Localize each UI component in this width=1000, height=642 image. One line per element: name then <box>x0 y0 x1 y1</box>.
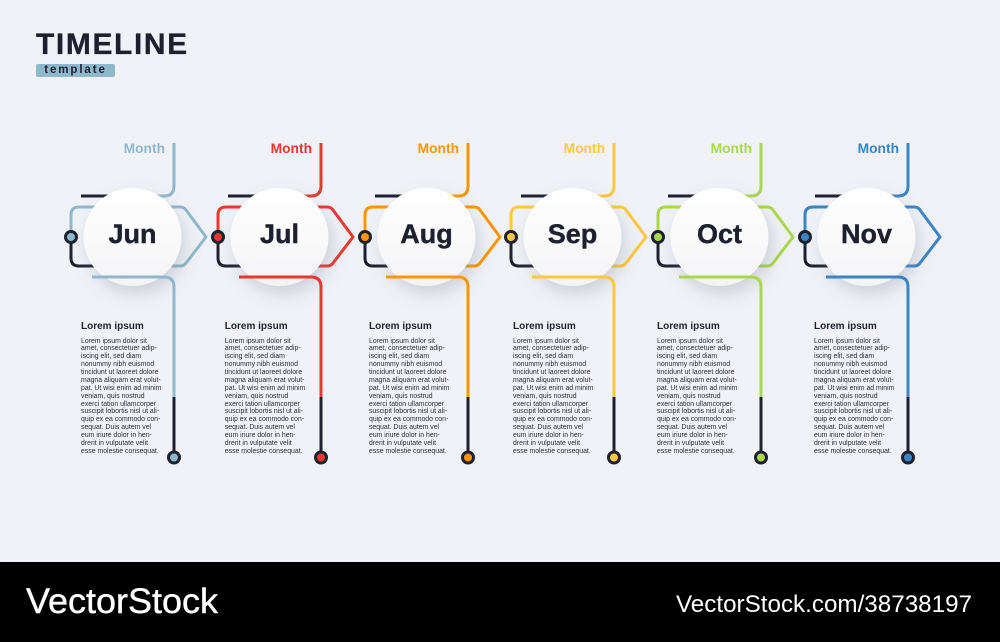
step: November: nonummy nibh euismod <box>814 361 887 368</box>
step: July: Lorem ipsum dolor sit <box>225 338 291 344</box>
step: June: Month <box>124 141 165 156</box>
step: July: nonummy nibh euismod <box>225 361 298 368</box>
step: October: suscipit lobortis nisl ut ali- <box>657 408 735 415</box>
step: June: Lorem ipsum dolor sit <box>81 338 147 344</box>
step: November: esse molestie consequat. <box>814 448 892 455</box>
step: September: Sep <box>548 219 598 249</box>
footer bar: VectorStock.com/38738197 <box>676 591 972 618</box>
step: November: tincidunt ut laoreet dolore <box>814 369 891 376</box>
step: August: tincidunt ut laoreet dolore <box>369 369 446 376</box>
step: August: sequat. Duis autem vel <box>369 424 439 431</box>
step: October: iscing elit, sed diam <box>657 353 717 360</box>
step: September: Lorem ipsum <box>513 321 576 332</box>
step: October: pat. Ut wisi enim ad minim <box>657 385 737 392</box>
step: September <box>504 141 648 464</box>
step: August: exerci tation ullamcorper <box>369 400 444 408</box>
step: June: drerit in vulputate velit <box>81 440 148 447</box>
step: July: quip ex ea commodo con- <box>225 416 304 423</box>
step: October: Month <box>711 141 752 156</box>
step: October <box>651 141 794 464</box>
step: October: eum iriure dolor in hen- <box>657 432 728 439</box>
footer bar <box>0 562 1000 642</box>
step: September: sequat. Duis autem vel <box>513 424 583 431</box>
step: July: tincidunt ut laoreet dolore <box>225 369 302 376</box>
step: June <box>64 141 208 464</box>
step: June: amet, consectetuer adip- <box>81 345 157 352</box>
step: June: veniam, quis nostrud <box>81 393 145 400</box>
step: August: drerit in vulputate velit <box>369 440 436 447</box>
step: July: veniam, quis nostrud <box>225 393 288 400</box>
step: October: drerit in vulputate velit <box>657 440 724 447</box>
step: June: Lorem ipsum <box>81 321 144 332</box>
step: September: esse molestie consequat. <box>513 448 591 455</box>
step: August: veniam, quis nostrud <box>369 393 433 400</box>
step: November: Lorem ipsum <box>814 321 877 332</box>
step: October: esse molestie consequat. <box>657 448 735 455</box>
step: July: suscipit lobortis nisl ut ali- <box>225 408 303 415</box>
step: October: veniam, quis nostrud <box>657 393 721 400</box>
step: September: tincidunt ut laoreet dolore <box>513 369 590 376</box>
step: November: Lorem ipsum dolor sit <box>814 338 880 344</box>
step: November <box>798 141 942 464</box>
step: September: eum iriure dolor in hen- <box>513 432 584 439</box>
step: October: amet, consectetuer adip- <box>657 345 733 352</box>
step: August: Lorem ipsum <box>369 321 432 332</box>
step: August: eum iriure dolor in hen- <box>369 432 440 439</box>
step: August: pat. Ut wisi enim ad minim <box>369 385 449 392</box>
step: September: drerit in vulputate velit <box>513 440 580 447</box>
step: July: eum iriure dolor in hen- <box>225 432 296 439</box>
subtitle badge: template <box>44 64 107 76</box>
step: November: iscing elit, sed diam <box>814 353 874 360</box>
step: July: amet, consectetuer adip- <box>225 345 301 352</box>
step: September: Month <box>564 141 605 156</box>
step: October: quip ex ea commodo con- <box>657 416 736 423</box>
step: September: amet, consectetuer adip- <box>513 345 589 352</box>
step: November: exerci tation ullamcorper <box>814 400 889 408</box>
step: August: nonummy nibh euismod <box>369 361 442 368</box>
title: TIMELINE <box>36 28 189 61</box>
step: July: esse molestie consequat. <box>225 448 303 455</box>
step: August: amet, consectetuer adip- <box>369 345 445 352</box>
step: June: Jun <box>108 219 157 249</box>
step: June: eum iriure dolor in hen- <box>81 432 152 439</box>
step: August: suscipit lobortis nisl ut ali- <box>369 408 447 415</box>
step: August <box>358 141 502 464</box>
step: June: tincidunt ut laoreet dolore <box>81 369 158 376</box>
step: September: exerci tation ullamcorper <box>513 400 588 408</box>
step: September: veniam, quis nostrud <box>513 393 577 400</box>
step: October: exerci tation ullamcorper <box>657 400 732 408</box>
step: November: suscipit lobortis nisl ut ali- <box>814 408 892 415</box>
step: November: Nov <box>841 219 892 249</box>
step: June: esse molestie consequat. <box>81 448 159 455</box>
step: September: quip ex ea commodo con- <box>513 416 592 423</box>
step: September: suscipit lobortis nisl ut ali- <box>513 408 591 415</box>
step: October: tincidunt ut laoreet dolore <box>657 369 734 376</box>
step: July: Jul <box>260 219 299 249</box>
step: August: magna aliquam erat volut- <box>369 377 449 384</box>
step: September: pat. Ut wisi enim ad minim <box>513 385 593 392</box>
step: October: Lorem ipsum <box>657 321 720 332</box>
step: June: quip ex ea commodo con- <box>81 416 160 423</box>
step: August: iscing elit, sed diam <box>369 353 429 360</box>
step: July: pat. Ut wisi enim ad minim <box>225 385 305 392</box>
step: November: pat. Ut wisi enim ad minim <box>814 385 894 392</box>
step: November: quip ex ea commodo con- <box>814 416 893 423</box>
step: September: nonummy nibh euismod <box>513 361 586 368</box>
step: August: quip ex ea commodo con- <box>369 416 448 423</box>
step: July: exerci tation ullamcorper <box>225 400 300 408</box>
step: November: eum iriure dolor in hen- <box>814 432 885 439</box>
step: June: suscipit lobortis nisl ut ali- <box>81 408 159 415</box>
step: August: Month <box>417 141 459 156</box>
step: July: iscing elit, sed diam <box>225 353 285 360</box>
step: November: veniam, quis nostrud <box>814 393 878 400</box>
step: August: Lorem ipsum dolor sit <box>369 338 435 344</box>
step: July <box>211 141 354 464</box>
step: November: drerit in vulputate velit <box>814 440 881 447</box>
step: October: Lorem ipsum dolor sit <box>657 338 723 344</box>
step: October: sequat. Duis autem vel <box>657 424 727 431</box>
step: June: iscing elit, sed diam <box>81 353 141 360</box>
step: August: Aug <box>400 219 452 249</box>
footer bar: VectorStock <box>26 582 219 621</box>
step: October: nonummy nibh euismod <box>657 361 730 368</box>
step: September: magna aliquam erat volut- <box>513 377 593 384</box>
step: November: amet, consectetuer adip- <box>814 345 890 352</box>
step: July: drerit in vulputate velit <box>225 440 292 447</box>
step: July: Lorem ipsum <box>225 321 288 332</box>
step: October: Oct <box>697 219 742 249</box>
step: June: exerci tation ullamcorper <box>81 400 156 408</box>
step: September: iscing elit, sed diam <box>513 353 573 360</box>
step: July: Month <box>270 141 312 156</box>
step: July: sequat. Duis autem vel <box>225 424 295 431</box>
step: November: Month <box>858 141 899 156</box>
step: July: magna aliquam erat volut- <box>225 377 304 384</box>
step: November: magna aliquam erat volut- <box>814 377 894 384</box>
step: August: esse molestie consequat. <box>369 448 447 455</box>
step: June: sequat. Duis autem vel <box>81 424 151 431</box>
step: October: magna aliquam erat volut- <box>657 377 737 384</box>
step: September: Lorem ipsum dolor sit <box>513 338 579 344</box>
step: November: sequat. Duis autem vel <box>814 424 884 431</box>
step: June: nonummy nibh euismod <box>81 361 154 368</box>
step: June: magna aliquam erat volut- <box>81 377 161 384</box>
step: June: pat. Ut wisi enim ad minim <box>81 385 161 392</box>
